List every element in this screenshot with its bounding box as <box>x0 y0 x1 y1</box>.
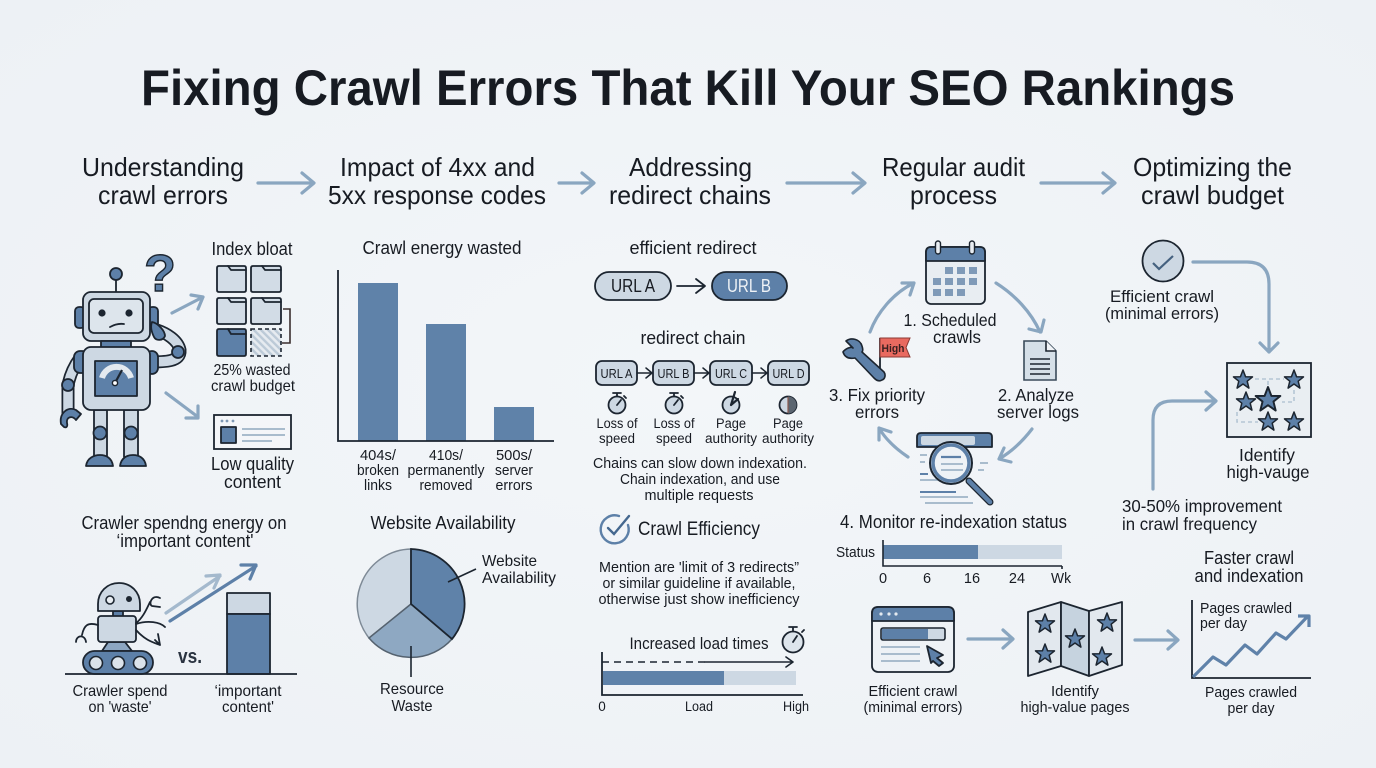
icon: crawl efficiency gauge check <box>601 515 629 543</box>
pie chart: website availability: Website <box>482 553 537 570</box>
labels: chain step effects: speed <box>599 431 635 446</box>
labels: chain step effects <box>596 416 814 446</box>
heading: addressing redirect chains <box>609 152 771 210</box>
label: wasted crawl budget <box>211 362 296 395</box>
label: crawler spending energy: ‘important content' <box>116 531 254 551</box>
chart: status progress: Status <box>836 544 875 561</box>
bar: important content <box>227 593 270 674</box>
chart: load time bar <box>598 652 809 714</box>
bar chart: crawl energy wasted: removed <box>420 477 472 494</box>
label: efficient crawl minimal errors: Efficient crawl <box>1110 287 1214 306</box>
arrows: rising energy <box>166 565 256 621</box>
chart: status progress: 0 <box>879 571 887 587</box>
arrow: check to stars <box>1193 262 1278 352</box>
label: identify high-value pages: high-value pages <box>1020 699 1130 716</box>
chart: status progress: 6 <box>923 571 931 587</box>
diagram: efficient redirect <box>595 272 787 300</box>
bar chart: crawl energy wasted <box>338 270 554 494</box>
label: low quality content: content <box>224 471 281 492</box>
label: important content: ‘important <box>214 683 282 700</box>
label: efficient crawl: Efficient crawl <box>868 683 958 700</box>
label: scheduled crawls: 1. Scheduled <box>904 310 996 330</box>
label: analyze server logs: server logs <box>997 402 1079 422</box>
label: faster crawl and indexation: and indexation <box>1194 566 1304 586</box>
text: chains note: multiple requests <box>644 487 754 504</box>
arrow: window to map <box>968 630 1013 648</box>
label: low quality content: Low quality <box>211 453 295 474</box>
heading: addressing redirect chains: redirect chains <box>609 180 771 210</box>
labels: chain step effects: Page <box>773 416 803 431</box>
arrow: step 3 to 4 <box>787 173 865 193</box>
label: crawler spend on waste: Crawler spend <box>72 683 168 700</box>
chart: status progress: Wk <box>1051 571 1072 587</box>
heading: understanding crawl errors: crawl errors <box>98 180 228 210</box>
icon: confused robot <box>61 245 184 466</box>
pie chart: website availability: Availability <box>482 570 556 587</box>
icon: wrench and high flag <box>843 338 910 381</box>
title: Fixing Crawl Errors That Kill Your SEO Rankings <box>141 60 1235 116</box>
arrow: step 4 to 5 <box>1041 173 1115 193</box>
arrow: improvement to stars <box>1153 392 1216 489</box>
label: identify high-value pages: Identify <box>1051 683 1099 700</box>
diagram: redirect chain: URL D <box>772 366 804 381</box>
text: redirect limit note: Mention are 'limit of 3 redirects” <box>599 559 799 576</box>
label: improvement in crawl frequency: 30-50% improvement <box>1122 496 1282 516</box>
pie chart: website availability: Waste <box>392 698 433 715</box>
pie chart: website availability <box>357 549 556 715</box>
baseline <box>65 673 297 675</box>
bar chart: crawl energy wasted: broken <box>357 462 399 479</box>
pie chart: website availability: Resource <box>380 681 444 698</box>
arrow: to low quality content <box>166 393 198 418</box>
chart: status progress: 16 <box>964 571 980 587</box>
labels: chain step effects: authority <box>762 431 814 446</box>
icon: stopwatch <box>782 627 804 652</box>
label: identify high-vauge: Identify <box>1239 445 1295 465</box>
label: crawl efficiency: Crawl Efficiency <box>638 518 760 540</box>
diagram: efficient redirect: URL A <box>611 276 655 296</box>
diagram: redirect chain: URL B <box>658 366 690 381</box>
label: efficient crawl <box>864 683 963 716</box>
labels: chain step effects: Loss of <box>654 416 695 431</box>
arrow: step 1 to 2 <box>258 173 314 193</box>
label: monitor re-indexation status: 4. Monitor re-indexation status <box>840 511 1067 532</box>
heading: understanding crawl errors <box>82 152 244 210</box>
label: pages crawled per day: per day <box>1228 700 1275 717</box>
label: important content: content' <box>222 699 274 716</box>
text: redirect limit note: otherwise just show inefficiency <box>598 591 800 608</box>
heading: regular audit process <box>882 152 1026 210</box>
label: fix priority errors: 3. Fix priority <box>829 385 925 405</box>
diagram: redirect chain: URL A <box>600 366 633 381</box>
diagram: redirect chain <box>596 361 809 385</box>
heading: optimizing the crawl budget: crawl budget <box>1141 180 1285 210</box>
icon: calendar <box>926 241 985 304</box>
text: chains note: Chains can slow down indexation. <box>593 455 807 472</box>
label: redirect chain: redirect chain <box>640 328 746 348</box>
label: scheduled crawls: crawls <box>933 327 981 347</box>
label: efficient crawl minimal errors <box>1105 287 1219 323</box>
label: efficient crawl minimal errors: (minimal errors) <box>1105 304 1219 323</box>
label: efficient crawl: (minimal errors) <box>864 699 963 716</box>
line chart: pages crawled per day <box>1192 600 1311 678</box>
bar chart: crawl energy wasted: permanently <box>408 462 485 479</box>
labels: chain step effects: authority <box>705 431 757 446</box>
label: crawler spend on waste: on 'waste' <box>88 699 152 716</box>
chart: load time bar: High <box>783 699 809 714</box>
diagram: redirect chain: URL C <box>715 366 747 381</box>
icon: check circle <box>1142 240 1184 282</box>
label: scheduled crawls <box>904 310 996 347</box>
label: increased load times: Increased load times <box>630 635 768 653</box>
heading: regular audit process: process <box>910 180 997 210</box>
label: wasted crawl budget: crawl budget <box>211 378 296 395</box>
heading: optimizing the crawl budget <box>1133 152 1292 210</box>
label: analyze server logs <box>997 385 1079 422</box>
labels: chain step effects: speed <box>656 431 692 446</box>
label: analyze server logs: 2. Analyze <box>998 385 1074 405</box>
label: identify high-vauge: high-vauge <box>1226 462 1310 482</box>
icon: wrench and high flag: High <box>882 343 905 355</box>
label: crawl energy wasted: Crawl energy wasted <box>362 238 522 258</box>
label: crawler spend on waste <box>72 683 168 716</box>
icon: low quality page <box>214 415 291 449</box>
label: efficient redirect: efficient redirect <box>630 238 756 258</box>
arrow: map to chart <box>1135 631 1178 649</box>
text: chains note: Chain indexation, and use <box>620 471 780 488</box>
text: redirect limit note <box>598 559 800 608</box>
icon: star grid <box>1227 363 1311 437</box>
label: faster crawl and indexation <box>1194 548 1304 586</box>
heading: understanding crawl errors: Understanding <box>82 152 244 182</box>
labels: chain step effects: Page <box>716 416 746 431</box>
arrow: fix to calendar <box>870 283 914 332</box>
bar chart: crawl energy wasted: links <box>364 477 392 494</box>
bar chart: crawl energy wasted: 500s/ <box>496 447 533 464</box>
arrow: monitor to fix <box>879 428 908 457</box>
heading: regular audit process: Regular audit <box>882 152 1026 182</box>
icon: map with stars <box>1028 602 1122 676</box>
label: identify high-vauge <box>1226 445 1310 482</box>
label: improvement in crawl frequency: in crawl frequency <box>1122 514 1257 534</box>
bar chart: crawl energy wasted: 404s/ <box>360 447 397 464</box>
label: fix priority errors <box>829 385 925 422</box>
arrow: calendar to logs <box>996 283 1044 332</box>
arrow: step 2 to 3 <box>559 173 594 193</box>
arrow: to index bloat <box>172 295 203 313</box>
chart: status progress: 24 <box>1009 571 1025 587</box>
icon: magnifier over search results <box>917 433 992 503</box>
chart: load time bar: Load <box>685 699 713 714</box>
label: crawler spending energy <box>82 513 286 551</box>
line chart: pages crawled per day: Pages crawled <box>1200 600 1292 617</box>
icons: stopwatches <box>608 392 796 414</box>
icon: tracked crawler robot <box>76 583 165 674</box>
heading: impact of response codes: Impact of 4xx and <box>340 152 535 182</box>
chart: status progress <box>836 540 1072 587</box>
icon: browser window with cursor <box>872 607 954 672</box>
text: chains note <box>593 455 807 504</box>
label: improvement in crawl frequency <box>1122 496 1282 534</box>
label: identify high-value pages <box>1020 683 1130 716</box>
heading: impact of response codes: 5xx response codes <box>328 180 546 210</box>
heading: optimizing the crawl budget: Optimizing the <box>1133 152 1292 182</box>
label: fix priority errors: errors <box>855 402 899 422</box>
labels: chain step effects: Loss of <box>596 416 638 431</box>
label: faster crawl and indexation: Faster crawl <box>1204 548 1294 568</box>
diagram: efficient redirect: URL B <box>727 276 771 296</box>
chart: load time bar: 0 <box>598 699 606 714</box>
label: pages crawled per day <box>1205 684 1297 717</box>
arrow: logs to monitor <box>999 429 1032 462</box>
icon: question mark: ? <box>144 245 176 303</box>
icon: server log document <box>1024 341 1056 380</box>
heading: addressing redirect chains: Addressing <box>629 152 752 182</box>
text: redirect limit note: or similar guideline if available, <box>602 575 796 592</box>
heading: impact of response codes <box>328 152 546 210</box>
label: important content <box>214 683 282 716</box>
bar chart: crawl energy wasted: 410s/ <box>429 447 464 464</box>
label: crawler spending energy: Crawler spendng energy on <box>82 513 286 533</box>
label: website availability heading: Website Availability <box>370 513 516 533</box>
label: low quality content <box>211 453 295 492</box>
icon: folder grid <box>217 266 290 356</box>
bar chart: crawl energy wasted: errors <box>496 477 532 494</box>
label: wasted crawl budget: 25% wasted <box>214 362 290 379</box>
bar chart: crawl energy wasted: server <box>495 462 533 479</box>
label: pages crawled per day: Pages crawled <box>1205 684 1297 701</box>
label: vs: vs. <box>178 646 202 668</box>
label: index bloat: Index bloat <box>212 239 292 259</box>
line chart: pages crawled per day: per day <box>1200 615 1247 632</box>
